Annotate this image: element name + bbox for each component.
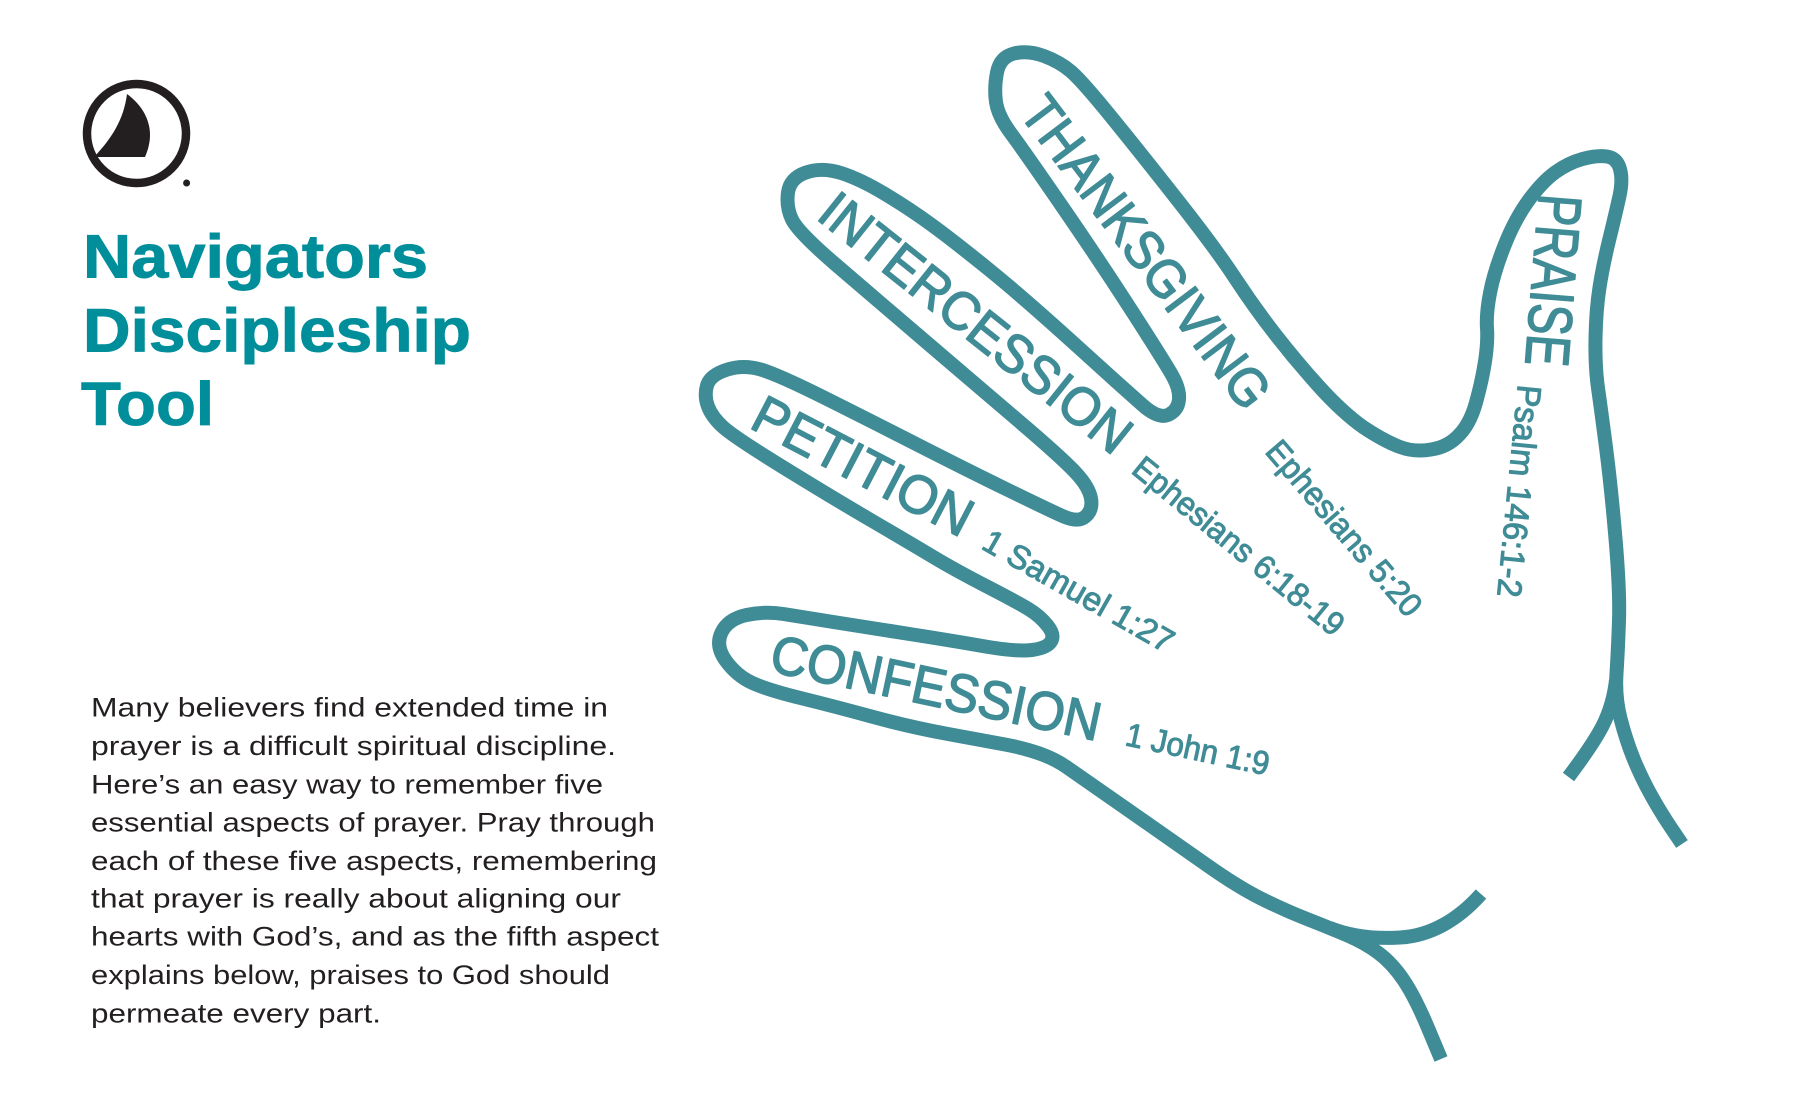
label: petition: PETITION [742,384,983,548]
title: Discipleship [83,297,471,365]
reference: 1 John 1:9: 1 John 1:9 [1123,716,1273,782]
label: thanksgiving: THANKSGIVING [1008,84,1283,421]
intro text block: Here’s an easy way to remember five [91,769,603,799]
wrist stub left [1330,894,1481,938]
intro text block: explains below, praises to God should [91,960,610,990]
label: intercession: INTERCESSION [808,180,1143,466]
wrist stub right [1568,680,1616,777]
intro text block: that prayer is really about aligning our [91,884,621,914]
intro text block: Many believers find extended time in [91,693,608,723]
reference: 1 Samuel 1:27: 1 Samuel 1:27 [977,522,1181,660]
label: confession: CONFESSION [766,624,1107,753]
intro text block: hearts with God’s, and as the fifth aspect [91,922,660,952]
intro text block: each of these five aspects, remembering [91,846,657,876]
reference: Ephesians 5:20: Ephesians 5:20 [1259,432,1430,624]
intro text block: prayer is a difficult spiritual discipline. [91,731,616,761]
label: praise: PRAISE [1511,192,1594,369]
intro text block: essential aspects of prayer. Pray through [91,808,655,838]
intro text block: permeate every part. [91,998,381,1028]
hand illustration [706,52,1682,1059]
reference: Psalm 146:1-2: Psalm 146:1-2 [1489,383,1548,599]
intro text block [91,693,660,1028]
reference: Ephesians 6:18-19: Ephesians 6:18-19 [1126,449,1352,643]
title [81,223,471,438]
title: Tool [81,370,214,438]
icon: Navigators sail logo [87,84,190,186]
title: Navigators [83,223,428,291]
hand outline [706,52,1682,1059]
